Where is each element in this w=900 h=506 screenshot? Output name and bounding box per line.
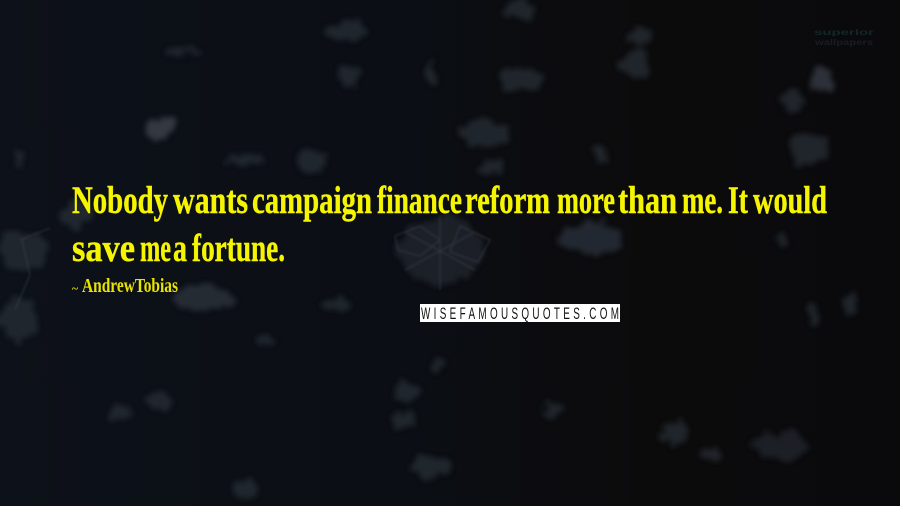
author attribution: AndrewTobias <box>82 275 178 297</box>
quote line 1: It <box>728 179 748 222</box>
quote line 2 <box>72 227 285 270</box>
quote line 1: finance <box>377 179 462 222</box>
quote line 2: me <box>140 227 171 270</box>
quote line 1: wants <box>173 179 248 222</box>
wisefamousquotes badge: WISEFAMOUSQUOTES.COM <box>421 304 619 323</box>
quote line 2: fortune. <box>192 227 285 270</box>
top-right wallpaper watermark: superior <box>814 28 874 37</box>
quote line 1: Nobody <box>72 179 168 222</box>
quote line 2: a <box>173 227 187 270</box>
quote line 1: would <box>753 179 827 222</box>
quote line 2: save <box>72 227 135 270</box>
quote line 1: campaign <box>252 179 372 222</box>
quote line 1 <box>72 179 827 222</box>
quote line 1: reform <box>465 179 550 222</box>
quote line 1: than <box>618 179 677 222</box>
top-right wallpaper watermark <box>814 28 874 47</box>
quote line 1: me. <box>682 179 723 222</box>
quote line 1: more <box>557 179 615 222</box>
quote text <box>72 179 827 270</box>
top-right wallpaper watermark: wallpapers <box>814 38 874 47</box>
author attribution: ~ <box>72 284 79 295</box>
